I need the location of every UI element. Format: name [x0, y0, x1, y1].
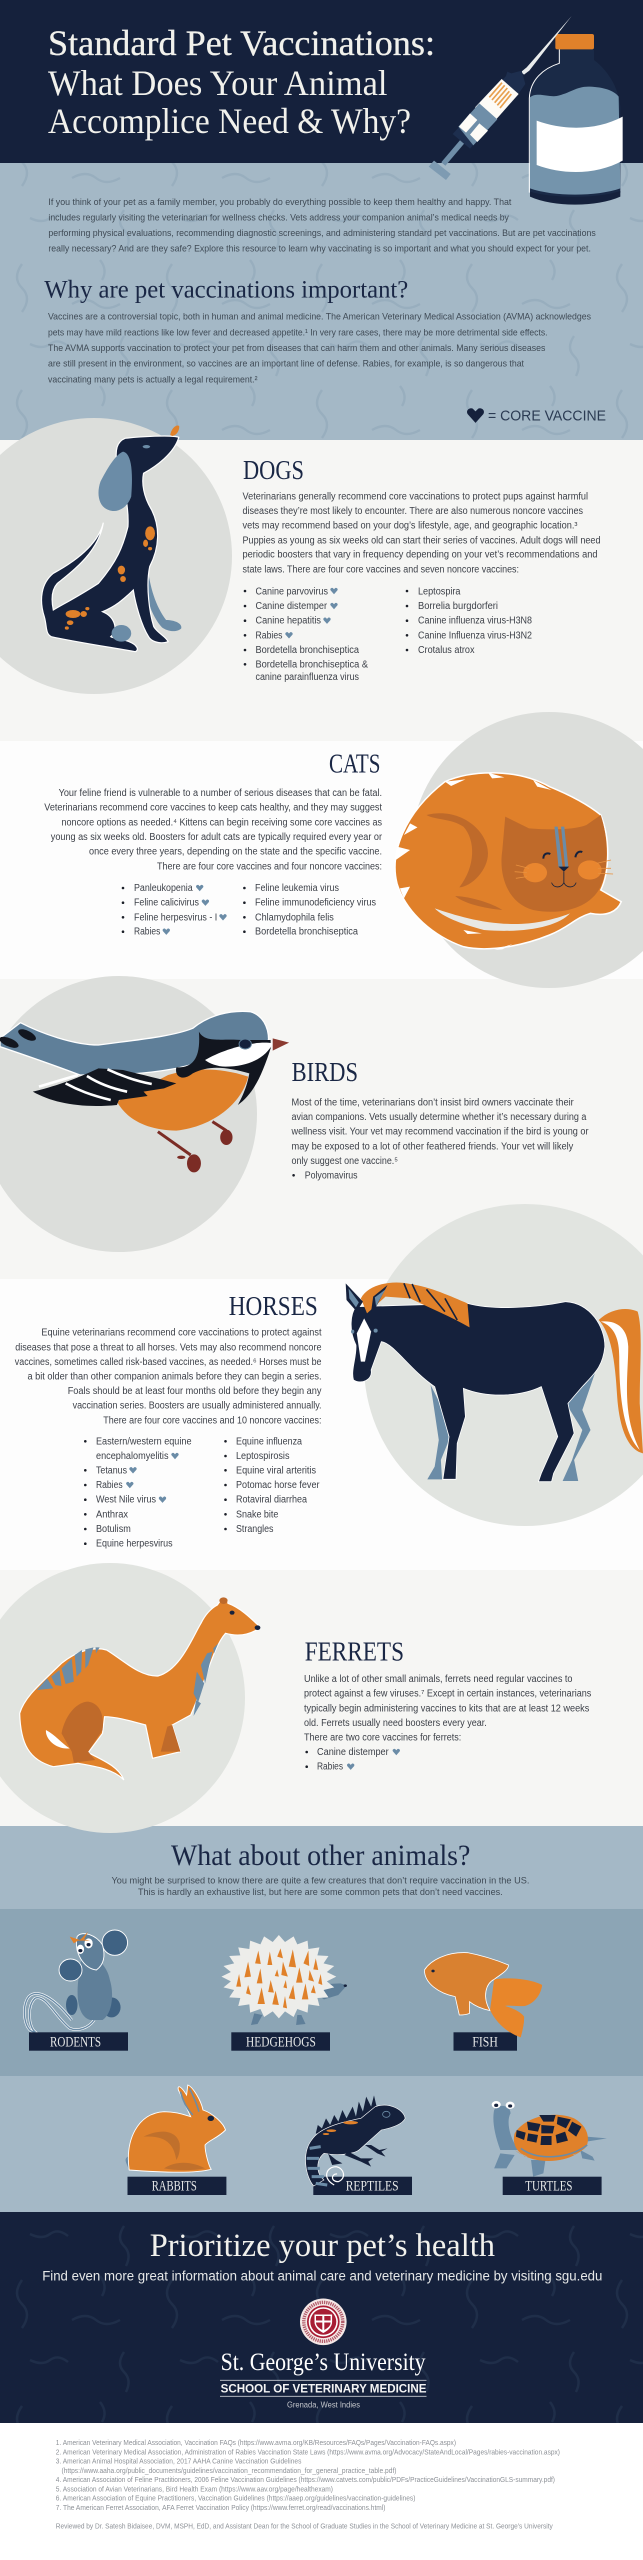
logo: university seal — [300, 2298, 347, 2345]
ferrets vaccine list — [305, 1747, 400, 1773]
dogs vaccine list — [244, 586, 533, 683]
references: 2. American Veterinary Medical Association, Administration of Rabies Vaccination State Laws (https://www.avma.org/Advocacy/StateAndLocal/Pages/rabies-vaccination.aspx) — [56, 2449, 560, 2456]
references: 5. Association of Avian Veterinarians, Bird Health Exam (https://www.aav.org/page/healthexam) — [56, 2486, 333, 2493]
ferrets text: typically begin administering vaccines to kits that are at least 12 weeks — [304, 1704, 589, 1715]
cats vaccine list — [122, 883, 376, 938]
horses vaccine list: Equine viral arteritis — [236, 1465, 316, 1476]
horses vaccine list: Strangles — [236, 1524, 274, 1535]
label: rodents — [29, 2032, 128, 2051]
footer band — [0, 2212, 643, 2423]
dogs text: Veterinarians generally recommend core vaccinations to protect pups against harmful — [242, 491, 588, 502]
label: turtles — [503, 2177, 602, 2195]
intro text: really necessary? And are they safe? Explore this resource to learn why vaccinating is so important and what you should expect for your pet. — [48, 244, 591, 254]
label: reptiles — [313, 2177, 412, 2195]
references: (https://www.aaha.org/public_documents/guidelines/vaccination_recommendation_for_general_practice_table.pdf) — [62, 2468, 396, 2475]
horses vaccine list: Botulism — [96, 1524, 131, 1535]
horse circle — [364, 1204, 643, 1526]
other animals text — [112, 1875, 529, 1897]
ferrets text: protect against a few viruses.⁷ Except in certain instances, veterinarians — [304, 1689, 591, 1700]
icon: ferret — [20, 1597, 260, 1780]
cats section background — [0, 741, 643, 979]
icon: bird — [0, 1011, 289, 1172]
fish fin over label — [490, 2010, 524, 2037]
horses vaccine list: Rabies — [96, 1480, 123, 1491]
dogs vaccine list: Canine distemper — [256, 601, 328, 612]
heading: other animals: What about other animals? — [171, 1839, 470, 1872]
dogs section background — [0, 440, 643, 741]
label: fish — [454, 2032, 517, 2051]
heading: why vaccinations: Why are pet vaccinations important? — [44, 277, 408, 304]
horses vaccine list: Equine influenza — [236, 1436, 302, 1447]
birds text — [291, 1097, 589, 1167]
dogs vaccine list: Bordetella bronchiseptica & — [256, 659, 368, 670]
horses text: vaccination series. Boosters are usually administered annually. — [73, 1401, 321, 1412]
footer call to action: Find even more great information about animal care and veterinary medicine by visiting sgu.edu — [42, 2269, 602, 2284]
cats vaccine list: Bordetella bronchiseptica — [255, 927, 359, 938]
cats vaccine list: Feline immunodeficiency virus — [255, 898, 376, 909]
dogs vaccine list: canine parainfluenza virus — [256, 672, 359, 683]
dogs vaccine list: Crotalus atrox — [418, 645, 475, 656]
intro text: includes regularly visiting the veterinarian for wellness checks. Vets address your companion animal’s medical needs by — [48, 212, 509, 222]
horses text: vaccines, sometimes called risk-based vaccines, as needed.⁶ Horses must be — [15, 1357, 322, 1368]
bottle — [529, 34, 623, 205]
intro text: If you think of your pet as a family member, you probably do everything possible to keep them healthy and happy. That — [48, 197, 512, 207]
cats vaccine list: Rabies — [134, 927, 160, 938]
title: Accomplice Need & Why? — [48, 101, 411, 141]
horses text: Foals should be at least four months old before they begin any — [68, 1386, 322, 1397]
dogs text: diseases they’re most likely to encounter. There are also numerous noncore vaccines — [242, 506, 583, 517]
horses text: a bit older than other companion animals before they can begin a series. — [28, 1372, 322, 1383]
heading: birds: BIRDS — [292, 1057, 358, 1087]
other animals text: This is hardly an exhaustive list, but here are some common pets that don’t need vaccines. — [138, 1887, 503, 1897]
dog circle — [0, 418, 232, 694]
label: turtles: TURTLES — [525, 2179, 572, 2195]
ferret circle — [0, 1563, 245, 1833]
why vaccinations text: pets may have mild reactions like low fever and decreased appetite.¹ In very rare cases, there may be more detrimental side effects. — [48, 327, 548, 337]
label: rabbits: RABBITS — [152, 2179, 197, 2195]
icon: dog — [42, 426, 181, 652]
cat circle — [411, 712, 643, 988]
dogs vaccine list: Borrelia burgdorferi — [418, 601, 498, 612]
ferrets text: Unlike a lot of other small animals, ferrets need regular vaccines to — [304, 1674, 573, 1685]
icon: hedgehog — [221, 1935, 347, 2025]
icon: vaccine bottle and syringe — [429, 16, 623, 205]
dogs vaccine list: Canine Influenza virus-H3N2 — [418, 630, 532, 641]
logo: university name: SCHOOL OF VETERINARY MEDICINE — [221, 2383, 427, 2395]
intro text — [48, 197, 596, 254]
icon: mouse — [24, 1930, 128, 2032]
references: 3. American Animal Hospital Association, 2017 AAHA Canine Vaccination Guidelines — [56, 2459, 302, 2466]
syringe — [429, 16, 572, 180]
horses vaccine list: Eastern/western equine — [96, 1436, 192, 1447]
dogs vaccine list: Canine parvovirus — [256, 586, 328, 597]
dogs text: vets may recommend based on your dog’s lifestyle, age, and geographic location.³ — [242, 521, 578, 532]
logo: university name: St. George’s University — [221, 2349, 426, 2376]
ferrets vaccine list: Canine distemper — [317, 1747, 389, 1758]
references: 6. American Association of Equine Practitioners, Vaccination Guidelines (https://aaep.org/guidelines/vaccination-guidelines) — [56, 2496, 415, 2503]
why vaccinations text — [48, 311, 591, 385]
horses text: diseases that pose a threat to all horses. Vets may also recommend noncore — [15, 1342, 322, 1353]
icon: horse — [346, 1282, 643, 1482]
label: reptiles: REPTILES — [346, 2179, 399, 2195]
birds section background — [0, 979, 643, 1279]
icon: iguana — [306, 2095, 405, 2186]
horses vaccine list: encephalomyelitis — [96, 1451, 169, 1462]
birds text: may be exposed to a lot of other feathered friends. Your vet will likely — [292, 1141, 573, 1152]
icon: turtle — [492, 2101, 607, 2177]
birds text: only suggest one vaccine.⁵ — [292, 1156, 398, 1167]
heading: dogs: DOGS — [243, 455, 304, 485]
horses vaccine list: Tetanus — [96, 1465, 127, 1476]
references: 4. American Association of Feline Practitioners, 2006 Feline Vaccination Guidelines (https://www.catvets.com/public/PDFs/PracticeGuidelines/VaccinationGLS-summary.pdf) — [56, 2477, 555, 2484]
icon: fish — [424, 1953, 542, 2032]
ferrets section background — [0, 1570, 643, 1826]
why vaccinations text: Vaccines are a controversial topic, both in human and animal medicine. The American Veterinary Medical Association (AVMA) acknowledges — [48, 311, 591, 321]
cats text: young as six weeks old. Boosters for adult cats are typically required every year or — [51, 832, 383, 843]
birds text: avian companions. Vets usually determine whether it’s necessary during a — [292, 1112, 587, 1123]
label: rabbits — [128, 2177, 226, 2195]
horses vaccine list: Anthrax — [96, 1509, 128, 1520]
horses text: There are four core vaccines and 10 noncore vaccines: — [103, 1415, 322, 1426]
cats vaccine list: Feline herpesvirus - I — [134, 912, 217, 923]
references: 7. The American Ferret Association, AFA Ferret Vaccination Policy (https://www.ferret.org/read/vaccinations.html) — [56, 2505, 386, 2512]
dogs vaccine list: Rabies — [256, 630, 283, 641]
horses vaccine list: West Nile virus — [96, 1495, 156, 1506]
horses text — [15, 1328, 322, 1426]
heading: ferrets: FERRETS — [305, 1637, 404, 1667]
ferrets text: old. Ferrets usually need boosters every year. — [304, 1718, 487, 1729]
horses vaccine list: Leptospirosis — [236, 1451, 290, 1462]
cats vaccine list: Feline leukemia virus — [255, 883, 339, 894]
ferrets text — [304, 1674, 591, 1743]
references background — [0, 2423, 643, 2560]
dogs vaccine list: Leptospira — [418, 586, 461, 597]
horses text: Equine veterinarians recommend core vaccinations to protect against — [41, 1328, 322, 1339]
dogs text: periodic boosters that vary in frequency depending on your vet’s recommendations and — [242, 550, 598, 561]
ferrets text: There are two core vaccines for ferrets: — [304, 1732, 461, 1743]
label: rodents: RODENTS — [50, 2035, 101, 2051]
horses vaccine list: Equine herpesvirus — [96, 1539, 173, 1550]
label: hedgehogs: HEDGEHOGS — [246, 2035, 316, 2051]
cats vaccine list: Panleukopenia — [134, 883, 193, 894]
other animals text: You might be surprised to know there are quite a few creatures that don’t require vaccination in the US. — [112, 1875, 529, 1885]
horses vaccine list: Snake bite — [236, 1509, 279, 1520]
reviewer credit: Reviewed by Dr. Satesh Bidaisee, DVM, MSPH, EdD, and Assistant Dean for the School of Graduate Studies in the School of Veterinary Medicine at St. George’s University — [56, 2523, 553, 2530]
cats text — [44, 788, 383, 872]
birds text: Most of the time, veterinarians don’t insist bird owners vaccinate their — [292, 1097, 574, 1108]
dogs vaccine list: Bordetella bronchiseptica — [256, 645, 360, 656]
horses vaccine list: Potomac horse fever — [236, 1480, 320, 1491]
title: What Does Your Animal — [48, 63, 388, 103]
title: Standard Pet Vaccinations: — [48, 23, 435, 63]
horses vaccine list — [84, 1436, 320, 1550]
logo: university name: Grenada, West Indies — [287, 2400, 360, 2410]
label: fish: FISH — [472, 2035, 498, 2051]
horses vaccine list: Rotaviral diarrhea — [236, 1495, 308, 1506]
heading: prioritize: Prioritize your pet’s health — [150, 2228, 495, 2264]
logo: university name — [220, 2349, 427, 2410]
icon: cat — [395, 773, 621, 950]
why vaccinations text: are still present in the environment, so vaccines are an important line of defense. Rabies, for example, is so dangerous that — [48, 359, 524, 369]
dogs text: Puppies as young as six weeks old can start their series of vaccines. Adult dogs will need — [242, 535, 600, 546]
dogs text — [242, 491, 600, 575]
dogs text: state laws. There are four core vaccines and seven noncore vaccines: — [242, 564, 519, 575]
dogs vaccine list: Canine influenza virus-H3N8 — [418, 616, 533, 627]
intro text: performing physical evaluations, recommending diagnostic screenings, and administering standard pet vaccinations. But are pet vaccinations — [48, 228, 596, 238]
references: 1. American Veterinary Medical Association, Vaccination FAQs (https://www.avma.org/KB/Resources/FAQs/Pages/Vaccination-FAQs.aspx) — [56, 2440, 456, 2447]
heading: cats: CATS — [329, 749, 380, 779]
intro panel background — [0, 163, 643, 440]
references — [56, 2440, 560, 2512]
bird circle — [0, 976, 257, 1252]
cats vaccine list: Chlamydophila felis — [255, 912, 334, 923]
legend: core vaccine: = CORE VACCINE — [488, 408, 606, 425]
birds text: wellness visit. Your vet may recommend vaccination if the bird is young or — [291, 1127, 589, 1138]
why vaccinations text: vaccinating many pets is actually a legal requirement.² — [48, 375, 258, 385]
cats text: noncore options as needed.⁴ Kittens can begin receiving some core vaccines as — [62, 817, 382, 828]
dogs vaccine list: Canine hepatitis — [256, 616, 321, 627]
cats text: There are four core vaccines and four noncore vaccines: — [157, 861, 382, 872]
birds vaccine list: Polyomavirus — [305, 1170, 358, 1181]
title — [48, 23, 435, 141]
cats vaccine list: Feline calicivirus — [134, 898, 199, 909]
icon: rabbit — [126, 2085, 226, 2172]
why vaccinations text: The AVMA supports vaccination to protect your pet from diseases that can harm them and other animals. Many serious diseases — [48, 343, 546, 353]
cats text: Your feline friend is vulnerable to a number of serious diseases that can be fatal. — [59, 788, 382, 799]
ferrets vaccine list: Rabies — [317, 1762, 343, 1773]
header band — [0, 0, 643, 163]
other animals panel — [0, 1826, 643, 2212]
cats text: once every three years, depending on the state and the specific vaccine. — [89, 847, 382, 858]
heading: horses: HORSES — [229, 1291, 318, 1321]
cats text: Veterinarians recommend core vaccines to keep cats healthy, and they may suggest — [44, 803, 382, 814]
horses section background — [0, 1279, 643, 1570]
